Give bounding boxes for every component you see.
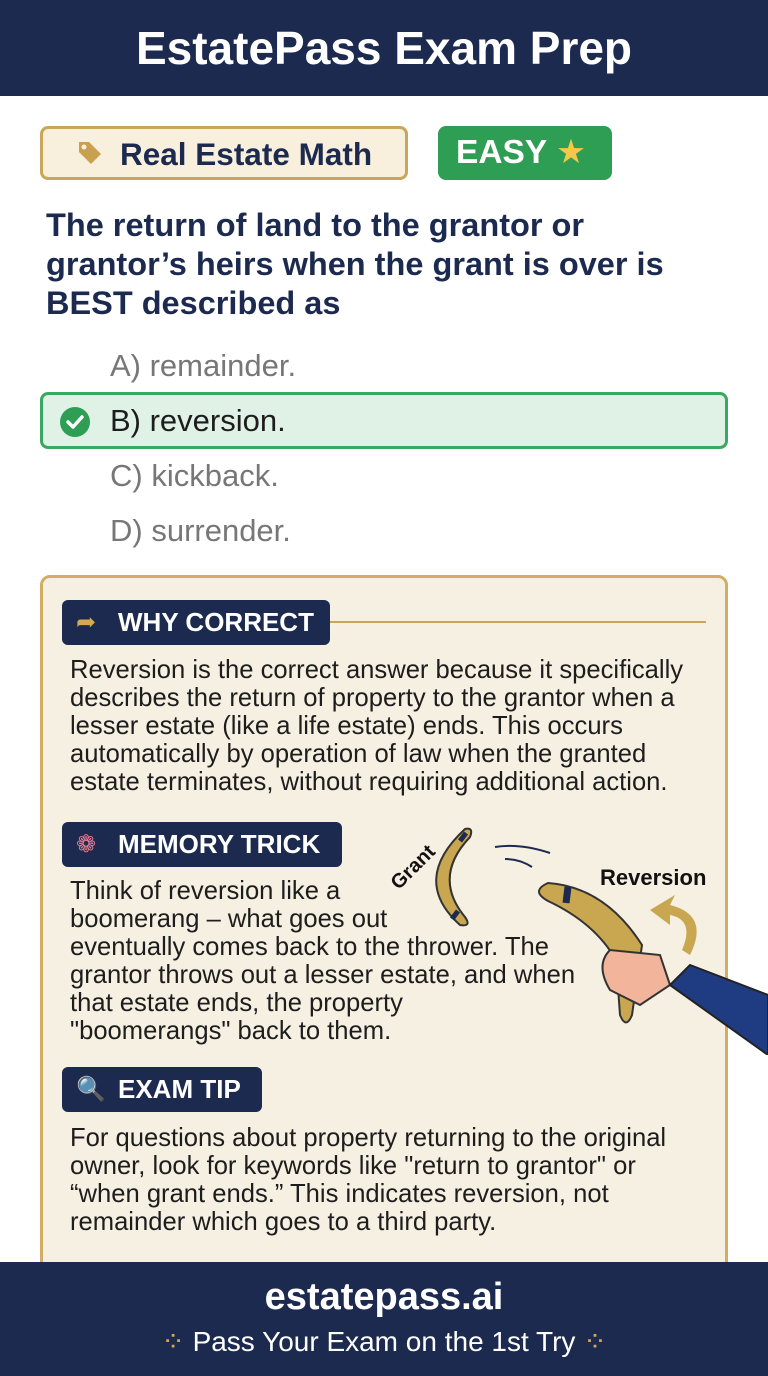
category tag: [40, 126, 408, 180]
why correct text: [70, 656, 683, 796]
why correct text: estate terminates, without requiring additional action.: [70, 768, 668, 796]
memory trick text: boomerang – what goes out: [70, 905, 387, 933]
icon: check: [60, 407, 90, 437]
illustration: boomerang and hand: Reversion: [600, 865, 706, 890]
why correct text: lesser estate (like a life estate) ends. This occurs: [70, 712, 623, 740]
footer: [0, 1262, 768, 1376]
exam tip text: “when grant ends.” This indicates reversion, not: [70, 1180, 609, 1208]
memory trick text: "boomerangs" back to them.: [70, 1017, 391, 1045]
footer site: estatepass.ai: [265, 1276, 503, 1318]
memory trick text: grantor throws out a lesser estate, and when: [70, 961, 575, 989]
question: The return of land to the grantor or: [46, 207, 584, 243]
exam tip text: For questions about property returning to the original: [70, 1124, 666, 1152]
badge: why correct: ➦: [76, 609, 96, 636]
question: grantor’s heirs when the grant is over is: [46, 246, 664, 282]
option B correct: [40, 392, 728, 449]
memory trick text: Think of reversion like a: [70, 877, 340, 905]
question: [46, 207, 664, 321]
option D: D) surrender.: [110, 513, 291, 548]
option A: A) remainder.: [110, 348, 296, 383]
difficulty badge: [438, 126, 612, 180]
difficulty badge: EASY ★: [456, 134, 586, 171]
option B correct: B) reversion.: [110, 403, 286, 438]
badge: why correct: WHY CORRECT: [118, 607, 314, 637]
icon: tag: [79, 142, 101, 164]
question: BEST described as: [46, 285, 340, 321]
footer tagline: ⁘ Pass Your Exam on the 1st Try ⁘: [161, 1326, 607, 1357]
why correct text: describes the return of property to the grantor when a: [70, 684, 675, 712]
exam tip text: remainder which goes to a third party.: [70, 1208, 496, 1236]
memory trick text: that estate ends, the property: [70, 989, 403, 1017]
why correct text: Reversion is the correct answer because it specifically: [70, 656, 683, 684]
badge: exam tip: EXAM TIP: [118, 1074, 241, 1104]
badge: memory trick: [62, 822, 342, 867]
badge: memory trick: ❁: [76, 831, 96, 858]
exam tip text: owner, look for keywords like "return to grantor" or: [70, 1152, 636, 1180]
memory trick text: eventually comes back to the thrower. The: [70, 933, 549, 961]
badge: exam tip: [62, 1067, 262, 1112]
badge: exam tip: 🔍: [76, 1076, 106, 1103]
why correct text: automatically by operation of law when the granted: [70, 740, 646, 768]
header bar: [0, 0, 768, 96]
memory trick text: [70, 877, 575, 1045]
badge: why correct: [62, 600, 330, 645]
illustration: boomerang and hand: Grant: [387, 841, 440, 894]
explanation panel: [40, 575, 728, 1295]
option C: C) kickback.: [110, 458, 279, 493]
exam tip text: [70, 1124, 666, 1236]
title: EstatePass Exam Prep: [136, 22, 632, 74]
category tag: Real Estate Math: [120, 136, 372, 172]
illustration: boomerang and hand: [387, 828, 768, 1055]
badge: memory trick: MEMORY TRICK: [118, 829, 320, 859]
